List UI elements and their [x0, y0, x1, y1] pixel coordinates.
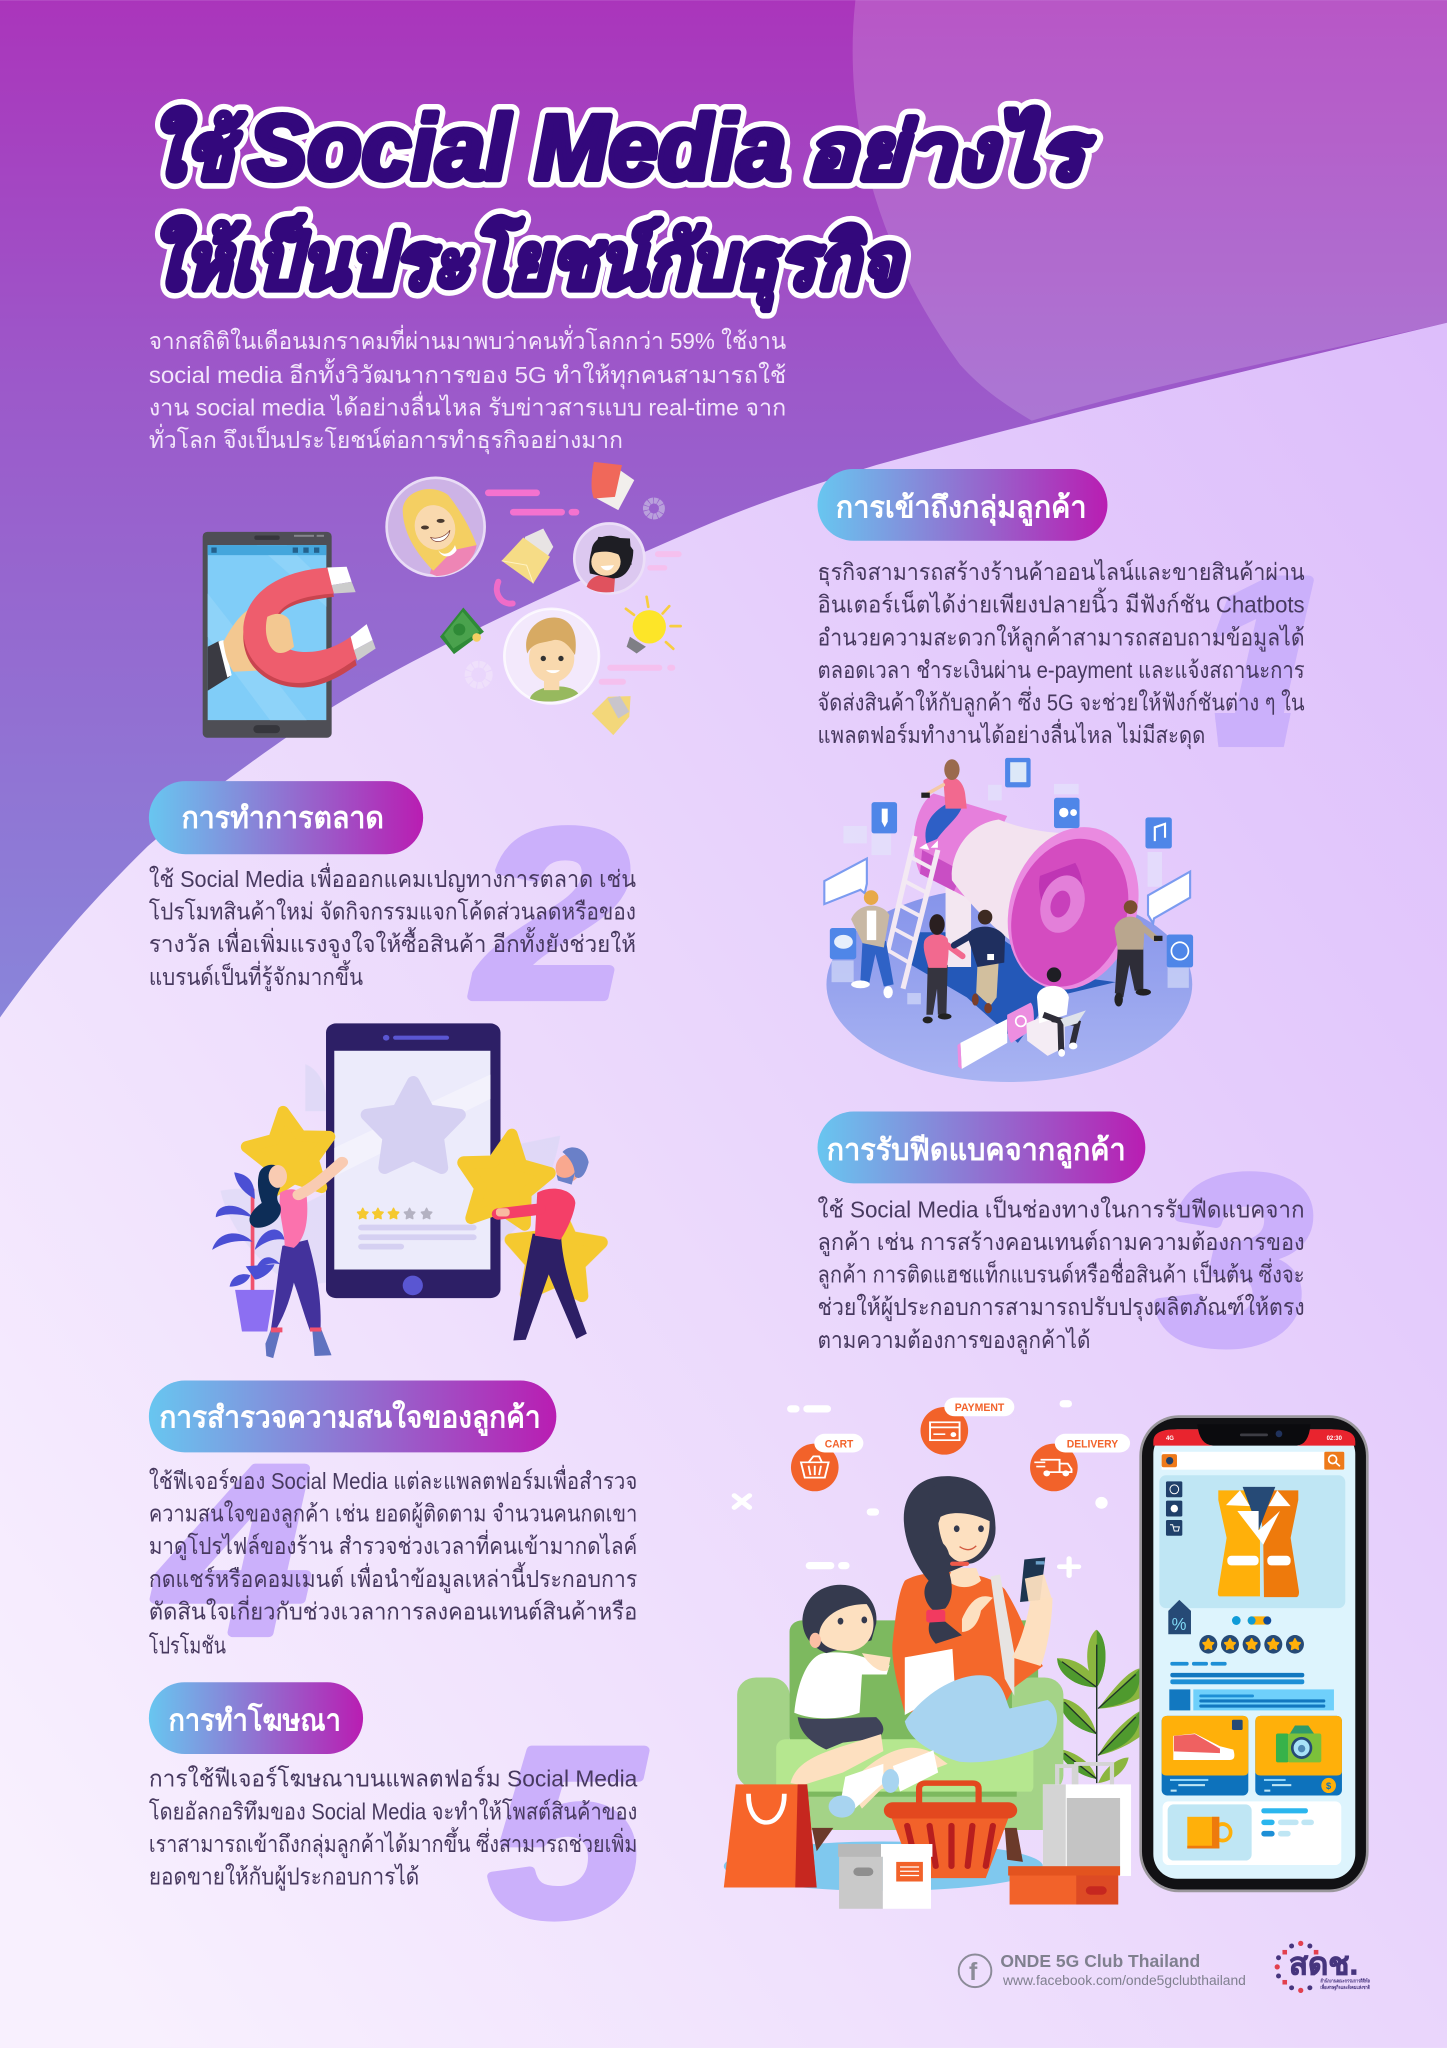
person: seated with laptop: [1026, 967, 1086, 1057]
shadow: [907, 932, 1116, 1043]
panel: interest survey: [149, 1381, 637, 1658]
plant: [212, 1172, 285, 1332]
footer: organisation logo: สำนักงานคณะกรรมการดิจิทัล: [1320, 1978, 1370, 1985]
title: ให้เป็นประโยชน์กับธุรกิจ: [149, 215, 905, 311]
body text: เราสามารถเข้าถึงกลุ่มลูกค้าได้มากขึ้น ซึ่งสามารถช่วยเพิ่ม: [149, 1827, 637, 1859]
body text: การใช้ฟีเจอร์โฆษณาบนแพลตฟอร์ม Social Media: [149, 1766, 638, 1792]
body text: [149, 1766, 638, 1892]
text hatch blocks: [832, 784, 1189, 1004]
icon: hand and suit: [208, 607, 267, 691]
intro paragraph: social media อีกทั้งวิวัฒนาการของ 5G ทำให้ทุกคนสามารถใช้: [149, 358, 786, 389]
sofa: [737, 1620, 1063, 1862]
panel: feedback: [818, 1111, 1305, 1355]
icon: envelope with letter: [502, 528, 553, 583]
box orange: [1008, 1866, 1120, 1905]
title: Social Media: [248, 97, 786, 199]
heading pill: การทำโฆษณา: [168, 1702, 341, 1738]
icon: gear light: [468, 664, 489, 685]
body text: แบรนด์เป็นที่รู้จักมากขึ้น: [149, 960, 363, 992]
heading pill: [149, 1682, 363, 1754]
number 2: 2: [472, 781, 628, 1048]
price tag: %: [1172, 1615, 1186, 1634]
icon: cart bubble: CART: [825, 1439, 853, 1450]
body text: ตามความต้องการของลูกค้าได้: [818, 1327, 1090, 1355]
title: [149, 97, 1096, 311]
man: [496, 1147, 589, 1341]
jacket: [1218, 1487, 1299, 1597]
body text: แพลตฟอร์มทำงานได้อย่างลื่นไหล ไม่มีสะดุด: [818, 718, 1205, 749]
illustration: magnet attracting customers: [203, 462, 682, 738]
person on top: [919, 759, 967, 850]
light circle: [853, 0, 1447, 421]
body text: อำนวยความสะดวกให้ลูกค้าสามารถสอบถามข้อมูลได้: [818, 624, 1305, 652]
footer: facebook credit: ONDE 5G Club Thailand: [1000, 1951, 1200, 1971]
person: man in beige: [1114, 900, 1162, 1006]
intro paragraph: งาน social media ได้อย่างลื่นไหล รับข่าวสารแบบ real-time จาก: [149, 390, 786, 420]
title: ใช้: [149, 107, 247, 196]
phone body: 02:30: [1327, 1435, 1343, 1442]
body text: ยอดขายให้กับผู้ประกอบการได้: [149, 1864, 419, 1892]
panel: customer reach: [818, 469, 1305, 749]
panel: marketing: [149, 781, 636, 992]
body text: อินเตอร์เน็ตได้ง่ายเพียงปลายนิ้ว มีฟังก์ชัน Chatbots: [818, 588, 1305, 618]
person: woman in pink: [923, 914, 963, 1023]
illustration: people holding review stars: [212, 1023, 603, 1358]
megaphone: [914, 793, 1160, 1009]
intro paragraph: จากสถิติในเดือนมกราคมที่ผ่านมาพบว่าคนทั่วโลกกว่า 59% ใช้งาน: [149, 324, 786, 354]
icon: tablet: [203, 532, 332, 738]
avatar: blonde woman: [387, 478, 485, 576]
title: ให้เป็นประโยชน์กับธุรกิจ: [149, 215, 905, 311]
product description lines: [1169, 1662, 1334, 1710]
icon: gear: [646, 500, 662, 516]
woman: [249, 1162, 342, 1358]
purple wave: [0, 0, 1447, 1017]
basket: [884, 1783, 1017, 1878]
phone: [326, 1023, 501, 1298]
heading pill: การรับฟีดแบคจากลูกค้า: [827, 1134, 1126, 1169]
mother: [829, 1476, 1057, 1818]
body text: โปรโมทสินค้าใหม่ จัดกิจกรรมแจกโค้ดส่วนลดหรือของ: [149, 899, 636, 925]
plant: [1057, 1630, 1141, 1783]
decorative dashes: [734, 1400, 1108, 1576]
body text: มาดูโปรไฟล์ของร้าน สำรวจช่วงเวลาที่คนเข้ามากดไลค์: [149, 1529, 637, 1561]
box grey: [838, 1844, 932, 1909]
number 4: 4: [155, 1417, 311, 1684]
icon: light bulb: [626, 597, 681, 653]
footer: organisation logo: [1275, 1941, 1370, 1993]
star held by woman: [242, 1106, 337, 1196]
icon: payment bubble: [921, 1398, 1014, 1455]
heading pill: [818, 469, 1107, 541]
icon: cart bubble: [791, 1434, 863, 1491]
white bag: [1043, 1764, 1131, 1876]
icon: payment bubble: PAYMENT: [955, 1403, 1004, 1414]
heading pill: [149, 781, 423, 854]
heading pill: [818, 1111, 1145, 1183]
icon: horseshoe magnet: [243, 567, 376, 688]
body text: ลูกค้า เช่น การสร้างคอนเทนต์ถามความต้องการของ: [818, 1229, 1305, 1257]
phone body: 4G: [1166, 1435, 1174, 1442]
intro paragraph: ทั่วโลก จึงเป็นประโยชน์ต่อการทำธุรกิจอย่างมาก: [149, 423, 623, 454]
background leaves: [220, 1064, 560, 1287]
avatar: blond boy: [504, 609, 599, 703]
search bar: [957, 1003, 1034, 1069]
body text: โดยอัลกอริทึมของ Social Media จะทำให้โพสต์สินค้าของ: [149, 1798, 637, 1824]
person: man on phone: [851, 890, 894, 998]
illustration: megaphone group: [824, 758, 1193, 1082]
title: อย่างไร: [804, 107, 1096, 196]
icon: small envelope: [592, 696, 631, 735]
shopping bag: [724, 1784, 817, 1887]
icon: book: [592, 462, 634, 510]
ladder: [887, 836, 938, 989]
body text: ธุรกิจสามารถสร้างร้านค้าออนไลน์และขายสินค้าผ่าน: [818, 559, 1305, 586]
body text: ใช้ Social Media เพื่อออกแคมเปญทางการตลาด เช่น: [149, 862, 636, 893]
number 5: 5: [490, 1699, 645, 1966]
colour dots: [1232, 1616, 1271, 1625]
product card: camera: [1255, 1716, 1342, 1795]
body text: โปรโมชัน: [149, 1632, 226, 1658]
panel: advertising: [149, 1682, 638, 1892]
icon: money: [440, 607, 484, 654]
body text: จัดส่งสินค้าให้กับลูกค้า ซึ่ง 5G จะช่วยให้ฟังก์ชันต่าง ๆ ใน: [818, 686, 1305, 718]
speech bubbles: [824, 859, 1190, 924]
avatar: dark hair woman: [574, 523, 644, 593]
icon: telephone: [497, 582, 513, 604]
icon: delivery bubble: [1030, 1434, 1130, 1491]
body text: ตัดสินใจเกี่ยวกับช่วงเวลาการลงคอนเทนต์สินค้าหรือ: [149, 1595, 637, 1625]
body text: ใช้ Social Media เป็นช่องทางในการรับฟีดแบคจาก: [818, 1194, 1305, 1222]
icon: facebook: f: [969, 1959, 978, 1986]
product card: camera: $: [1326, 1781, 1332, 1792]
platform: [826, 887, 1192, 1082]
star held by man: [455, 1130, 555, 1227]
search bar: [1162, 1452, 1344, 1470]
heading pill: [149, 1381, 556, 1452]
illustration: family shopping: [724, 1398, 1141, 1909]
heading pill: การเข้าถึงกลุ่มลูกค้า: [836, 491, 1087, 526]
body text: ความสนใจของลูกค้า เช่น ยอดผู้ติดตาม จำนวนคนกดเขา: [149, 1501, 637, 1529]
illustration: shopping app phone: [1139, 1415, 1369, 1892]
rating stars: [1199, 1635, 1304, 1654]
footer: organisation logo: สดช.: [1289, 1947, 1358, 1982]
footer: organisation logo: เพื่อเศรษฐกิจและสังคมแห่งชาติ: [1320, 1983, 1370, 1991]
title: อย่างไร: [804, 107, 1096, 196]
body text: รางวัล เพื่อเพิ่มแรงจูงใจให้ซื้อสินค้า อีกทั้งยังช่วยให้: [149, 927, 636, 959]
body text: [818, 559, 1305, 749]
phone body: [1139, 1415, 1369, 1892]
body text: [149, 862, 636, 992]
title: Social Media: [248, 97, 786, 199]
body text: ลูกค้า การติดแฮชแท็กแบรนด์หรือชื่อสินค้า เป็นต้น ซึ่งจะ: [818, 1258, 1305, 1290]
decorative bars: [485, 489, 682, 685]
number 1: 1: [1182, 529, 1336, 796]
floating app icons: [830, 758, 1193, 967]
body text: [149, 1464, 637, 1658]
icon: facebook: [959, 1954, 991, 1987]
heading pill: การสำรวจความสนใจของลูกค้า: [159, 1400, 541, 1437]
icon: delivery bubble: DELIVERY: [1067, 1439, 1119, 1450]
intro paragraph: [149, 324, 786, 454]
price tag: [1168, 1600, 1191, 1634]
product card: shoe: [1162, 1716, 1248, 1795]
footer: facebook credit: www.facebook.com/onde5gclubthailand: [1002, 1973, 1246, 1988]
body text: ตลอดเวลา ชำระเงินผ่าน e-payment และแจ้งสถานะการ: [818, 657, 1305, 683]
floor rug: [724, 1841, 1043, 1891]
number 3: 3: [1157, 1127, 1311, 1394]
body text: ช่วยให้ผู้ประกอบการสามารถปรับปรุงผลิตภัณฑ์ให้ตรง: [818, 1294, 1305, 1322]
body text: [818, 1194, 1305, 1355]
child: [790, 1585, 891, 1785]
title: ใช้: [149, 107, 247, 196]
product panel: [1159, 1475, 1345, 1608]
product card: mug: [1163, 1801, 1341, 1865]
body text: กดแชร์หรือคอมเมนต์ เพื่อนำข้อมูลเหล่านี้ประกอบการ: [149, 1562, 637, 1594]
star behind man: [509, 1207, 603, 1296]
body text: ใช้ฟีเจอร์ของ Social Media แต่ละแพลตฟอร์มเพื่อสำรวจ: [149, 1464, 637, 1494]
footer: facebook credit: [959, 1951, 1246, 1988]
person: man with coffee: [954, 910, 1005, 1013]
heading pill: การทำการตลาด: [182, 802, 384, 835]
